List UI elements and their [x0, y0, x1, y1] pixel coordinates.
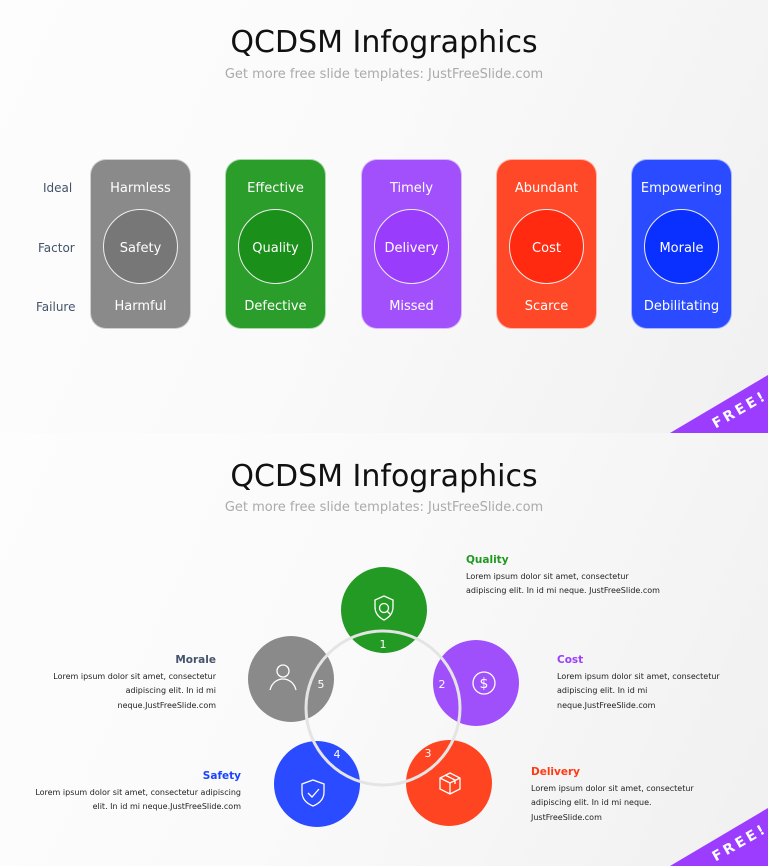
- text: quality: adipiscing elit. In id mi neque. JustFreeSlide.com: [466, 586, 660, 595]
- numbers: 5: [318, 678, 324, 691]
- numbers: [318, 638, 446, 761]
- text: safety: [35, 770, 241, 811]
- text: quality: [466, 554, 660, 595]
- text: safety: Lorem ipsum dolor sit amet, consectetur adipiscing: [35, 788, 241, 796]
- text: delivery: Delivery: [531, 766, 580, 778]
- card: quality: Quality: [252, 241, 299, 256]
- card: morale: Empowering: [641, 181, 722, 196]
- text: quality: Quality: [466, 554, 509, 566]
- card: quality: Defective: [244, 299, 307, 314]
- text: cost: neque.JustFreeSlide.com: [557, 700, 655, 710]
- title: QCDSM Infographics: [230, 459, 538, 494]
- numbers: 4: [334, 748, 340, 761]
- text: morale: neque.JustFreeSlide.com: [118, 700, 216, 710]
- slide 2: [0, 433, 768, 866]
- circle 2 cost: $: [480, 676, 488, 692]
- cycle diagram: [248, 567, 768, 866]
- card: safety: Harmful: [115, 299, 166, 314]
- circle 1 quality: [341, 567, 427, 653]
- numbers: 3: [424, 747, 432, 760]
- card: safety: [90, 159, 191, 329]
- text: cost: Cost: [557, 654, 583, 666]
- subtitle: Get more free slide templates: JustFreeSlide.com: [225, 67, 543, 82]
- text: delivery: [530, 766, 694, 822]
- card: cost: Abundant: [515, 181, 578, 196]
- text: cost: Lorem ipsum dolor sit amet, consectetur: [557, 672, 720, 680]
- card: delivery: Missed: [389, 299, 434, 314]
- circle 4 safety: [274, 741, 360, 827]
- numbers: 1: [380, 638, 386, 651]
- text: morale: Morale: [175, 654, 216, 666]
- card: quality: Effective: [247, 181, 304, 196]
- text: morale: Lorem ipsum dolor sit amet, consectetur: [53, 672, 216, 680]
- card: delivery: Timely: [390, 181, 433, 196]
- title: QCDSM Infographics: [230, 25, 538, 60]
- card: safety: Safety: [120, 241, 161, 256]
- ring: [306, 631, 460, 785]
- card: delivery: [361, 159, 462, 329]
- card: safety: Harmless: [110, 181, 171, 196]
- card: delivery: Delivery: [385, 241, 438, 256]
- card: cost: Cost: [532, 241, 561, 256]
- text: morale: adipiscing elit. In id mi: [126, 686, 216, 695]
- text: quality: Lorem ipsum dolor sit amet, consectetur: [466, 572, 629, 580]
- numbers: 2: [438, 678, 446, 691]
- free ribbon: [670, 375, 768, 433]
- subtitle: Get more free slide templates: JustFreeSlide.com: [225, 500, 543, 515]
- text: morale: [53, 654, 216, 710]
- text: cost: adipiscing elit. In id mi: [557, 686, 647, 695]
- circle 2 cost: [433, 640, 519, 726]
- card: cost: Scarce: [525, 299, 568, 314]
- card: quality: [225, 159, 326, 329]
- card: cost: [496, 159, 597, 329]
- text: delivery: adipiscing elit. In id mi neque.: [531, 798, 652, 807]
- circle 5 morale: [248, 636, 334, 722]
- text: safety: elit. In id mi neque.JustFreeSlide.com: [93, 802, 241, 811]
- card: morale: [631, 159, 732, 329]
- circle 3 delivery: [406, 740, 492, 826]
- text: delivery: Lorem ipsum dolor sit amet, consectetur: [531, 784, 694, 792]
- card: morale: Morale: [659, 241, 704, 256]
- row label: factor: Factor: [38, 241, 75, 255]
- text: delivery: JustFreeSlide.com: [531, 812, 602, 822]
- text: cost: [557, 654, 720, 710]
- row label: failure: Failure: [36, 300, 75, 314]
- slide 1: [0, 0, 768, 433]
- card: morale: Debilitating: [644, 299, 719, 314]
- text: safety: Safety: [203, 770, 241, 782]
- row label: ideal: Ideal: [43, 181, 72, 195]
